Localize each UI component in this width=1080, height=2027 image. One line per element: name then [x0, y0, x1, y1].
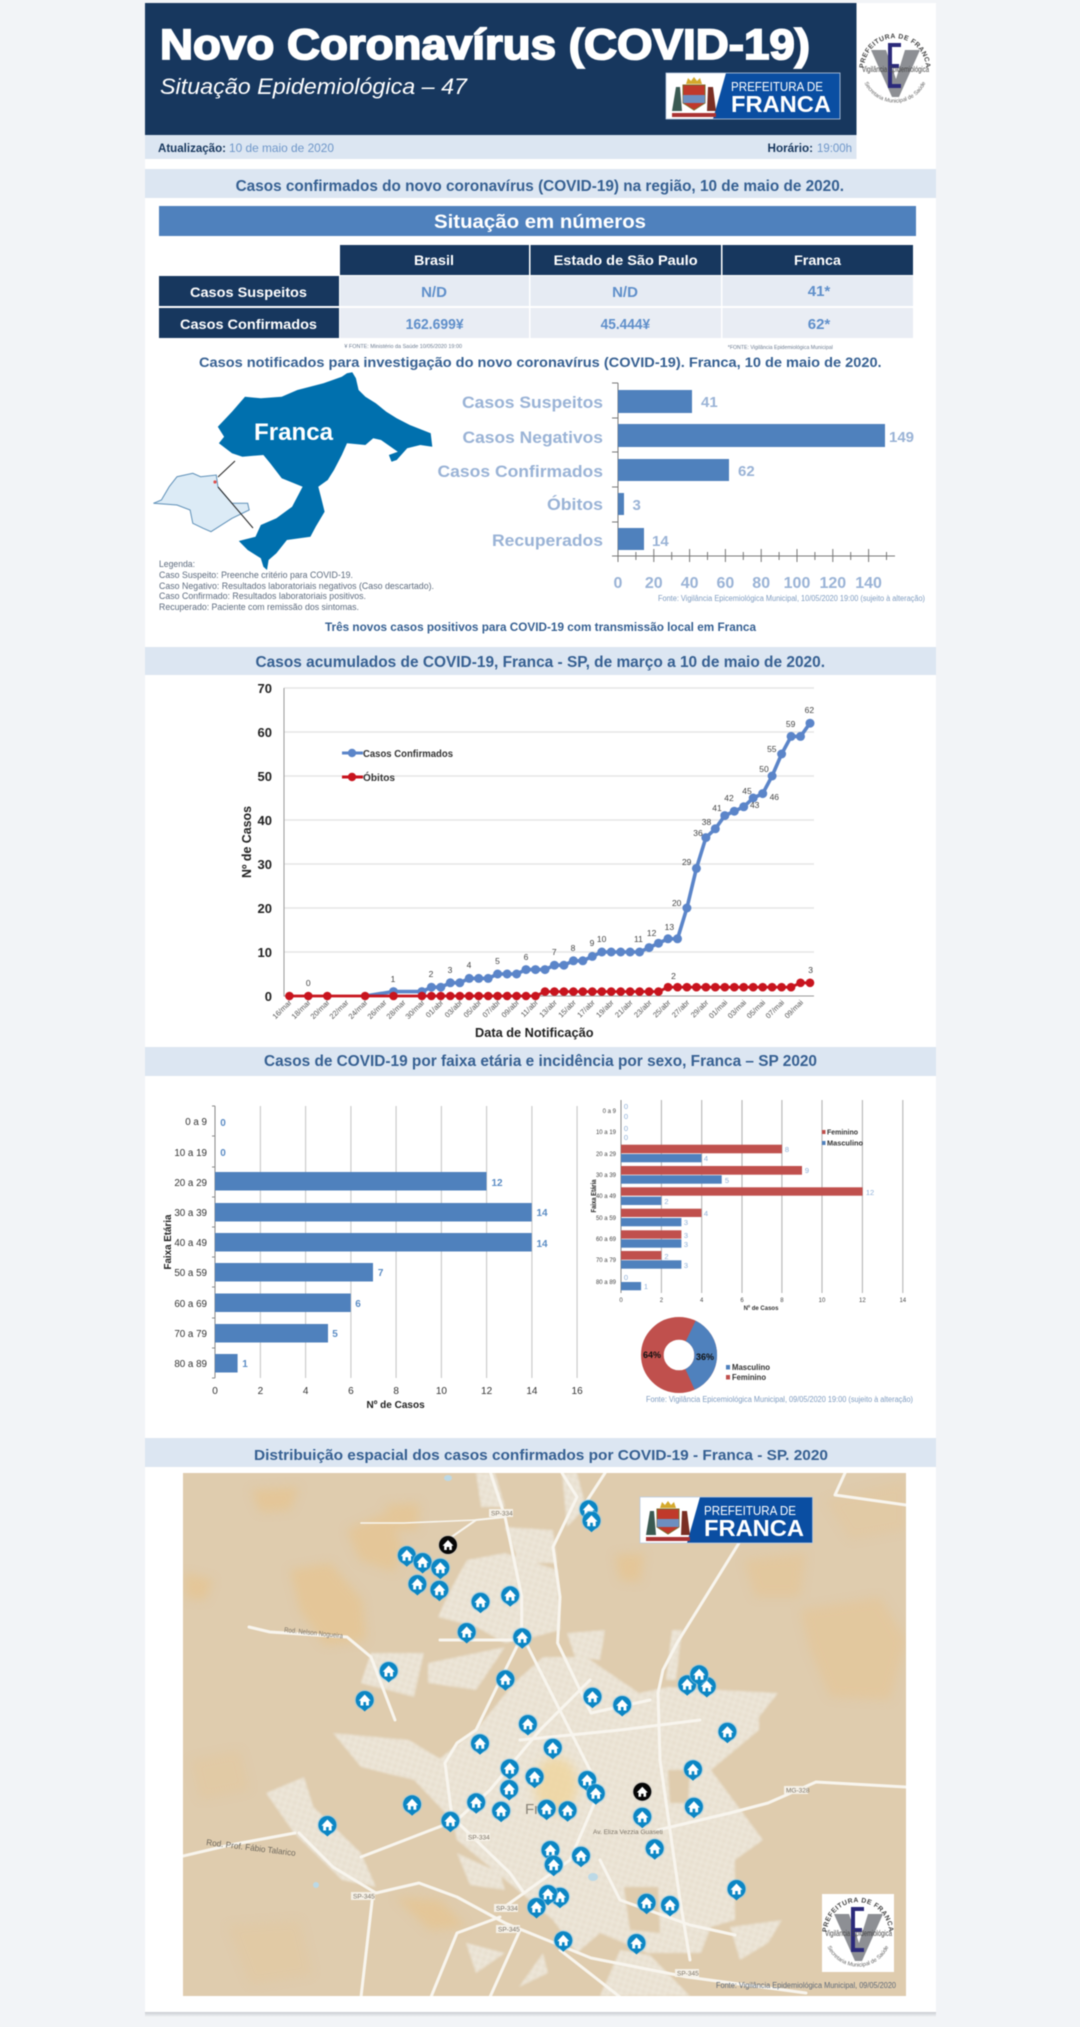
- map road labels: Fr: [525, 1801, 539, 1818]
- chart legend: [342, 749, 453, 784]
- bar chart: faixa etária: 0: [220, 1118, 226, 1129]
- data labels: 59: [786, 719, 796, 729]
- logo: Prefeitura de Franca on map: [640, 1497, 813, 1543]
- legend text: Recuperado: Paciente com remissão dos sintomas.: [159, 602, 359, 612]
- bar chart: incidência por sexo: 12: [866, 1188, 874, 1197]
- data labels: 6: [524, 952, 529, 962]
- data labels: 36: [693, 828, 703, 838]
- bar chart: incidência por sexo: 3: [684, 1231, 688, 1240]
- bar chart: casos notificados: Recuperados: [492, 531, 603, 550]
- map road labels: Rod. Prof. Fábio Talarico: [206, 1837, 297, 1858]
- bar chart: faixa etária: 0: [212, 1386, 218, 1397]
- section heading: região: [145, 169, 936, 198]
- bar chart: incidência por sexo: 50 a 59: [596, 1216, 617, 1222]
- data labels: 20: [672, 898, 682, 908]
- map: Franca municipality: [218, 372, 432, 570]
- data labels: 29: [682, 857, 692, 867]
- map: Franca municipality: Franca: [254, 419, 334, 446]
- data labels: 46: [770, 792, 779, 802]
- header banner: [145, 3, 856, 135]
- map pins: deaths: [438, 1535, 652, 1802]
- x axis date labels: 03/abr: [443, 998, 465, 1019]
- bar chart: casos notificados: Casos Confirmados: [438, 462, 603, 481]
- data labels: 43: [750, 800, 760, 810]
- panel: situação em números: [159, 206, 916, 351]
- bar chart: faixa etária: 14: [526, 1386, 538, 1397]
- data labels: 55: [767, 744, 777, 754]
- bar chart: casos notificados: 41: [701, 394, 718, 411]
- bar chart: incidência por sexo: 30 a 39: [596, 1173, 617, 1179]
- title: Novo Coronavírus (COVID-19): [160, 21, 810, 69]
- bar chart: incidência por sexo: 1: [644, 1282, 648, 1291]
- bar chart: incidência por sexo: 8: [780, 1298, 784, 1304]
- x axis date labels: 03/mai: [726, 998, 748, 1020]
- bar chart: faixa etária: 30 a 39: [174, 1208, 207, 1219]
- series: casos confirmados: [365, 719, 814, 996]
- y axis labels: [258, 681, 272, 1004]
- data labels: 62: [805, 705, 814, 715]
- x axis date labels: 28/mar: [385, 998, 408, 1021]
- x axis date labels: 23/abr: [632, 998, 654, 1019]
- bar chart: casos notificados: 62: [738, 463, 755, 480]
- logo: Prefeitura de Franca: PREFEITURA DE: [731, 80, 823, 94]
- bar chart: faixa etária: 10: [436, 1386, 447, 1397]
- logo: Vigilância Epidemiológica seal: [858, 32, 932, 104]
- data labels: 13: [665, 922, 674, 932]
- footnotes: ¥ FONTE: Ministério da Saúde 10/05/2020 19:00: [344, 344, 462, 350]
- x axis date labels: 07/mai: [764, 998, 786, 1020]
- bar chart: incidência por sexo: 20 a 29: [596, 1152, 617, 1158]
- legend text: Caso Suspeito: Preenche critério para COVID-19.: [159, 570, 353, 580]
- x axis date labels: 16/mar: [271, 998, 294, 1021]
- table: Casos Confirmados: [180, 316, 317, 332]
- logo: Vigilância Epidemiológica on map: [822, 1894, 894, 1972]
- bar chart: incidência por sexo: 0 a 9: [603, 1109, 617, 1115]
- data labels: 0: [306, 978, 311, 988]
- bar chart: incidência por sexo: Nº de Casos: [744, 1306, 779, 1312]
- bar chart: incidência por sexo: Faixa Etária: [591, 1179, 598, 1212]
- bar chart: incidência por sexo: 40 a 49: [596, 1194, 617, 1200]
- bar chart: incidência por sexo: 80 a 89: [596, 1280, 617, 1286]
- bar chart: incidência por sexo: 0: [624, 1124, 628, 1133]
- bar chart: faixa etária: 10 a 19: [174, 1148, 207, 1159]
- bar chart: faixa etária: 12: [481, 1386, 493, 1397]
- table: 62*: [808, 316, 830, 333]
- section heading: distribuição espacial: [145, 1438, 936, 1467]
- bar chart: incidência por sexo: 60 a 69: [596, 1237, 617, 1243]
- heading: casos notificados: Casos notificados para investigação do novo coronavírus (COVID-19). Franca, 10 de maio de 2020.: [199, 354, 882, 370]
- bar chart: incidência por sexo: 4: [700, 1298, 704, 1304]
- update bar: 19:00h: [817, 141, 852, 155]
- bar chart: incidência por sexo: 14: [899, 1298, 907, 1304]
- donut chart: sexo: 64%: [643, 1350, 661, 1360]
- x axis date labels: 26/mar: [366, 998, 389, 1021]
- bar chart: incidência por sexo: 3: [684, 1218, 688, 1227]
- data labels: 3: [808, 965, 813, 975]
- update bar: [145, 135, 856, 159]
- x axis date labels: [271, 998, 805, 1021]
- bar chart: incidência por sexo: 2: [660, 1298, 664, 1304]
- bar chart: faixa etária: 1: [242, 1359, 248, 1370]
- bar chart: incidência por sexo: 2: [664, 1252, 669, 1261]
- bar chart: faixa etária: 14: [536, 1239, 548, 1250]
- map road labels: MG-328: [786, 1788, 810, 1794]
- data labels: 2: [429, 969, 434, 979]
- bar chart: faixa etária: 6: [348, 1386, 354, 1397]
- table: Franca: [794, 252, 841, 268]
- x axis date labels: 01/abr: [424, 998, 446, 1019]
- table: 162.699¥: [406, 316, 464, 333]
- map road labels: SP-334: [491, 1510, 513, 1518]
- logo: Prefeitura de Franca on map: PREFEITURA DE: [704, 1504, 796, 1518]
- x axis date labels: 29/abr: [689, 998, 711, 1019]
- data labels: 41: [712, 803, 722, 813]
- bar chart: faixa etária: 50 a 59: [174, 1268, 207, 1279]
- chart legend: Casos Confirmados: [363, 749, 453, 760]
- x axis date labels: 09/abr: [500, 998, 521, 1019]
- logo: Prefeitura de Franca: [666, 73, 840, 119]
- y axis title: Nº de Casos: [239, 806, 254, 878]
- data labels: 7: [552, 947, 557, 957]
- data labels: 5: [495, 956, 500, 966]
- bar chart: casos notificados: 140: [855, 575, 882, 592]
- x axis date labels: 20/mar: [309, 998, 332, 1021]
- source note: faixa etária: Fonte: Vigilância Epicemiológica Municipal, 09/05/2020 19:00 (sujeito à alteração): [646, 1395, 913, 1404]
- bar chart: incidência por sexo: 12: [859, 1298, 866, 1304]
- legend: sexo: Feminino: [827, 1130, 858, 1136]
- bar chart: incidência por sexo: 0: [624, 1273, 628, 1282]
- note: novos casos: Três novos casos positivos para COVID-19 com transmissão local em Franca: [325, 620, 756, 634]
- footnotes: *FONTE: Vigilância Epidemiológica Municipal: [728, 345, 833, 351]
- section heading: região: Casos confirmados do novo coronavírus (COVID-19) na região, 10 de maio de 2020.: [236, 178, 844, 195]
- x axis date labels: 05/mai: [745, 998, 767, 1020]
- bar chart: faixa etária: 70 a 79: [174, 1329, 207, 1340]
- logo: Prefeitura de Franca on map: FRANCA: [704, 1515, 804, 1541]
- y axis labels: 30: [258, 857, 272, 872]
- x axis date labels: 07/abr: [481, 998, 502, 1019]
- map road labels: SP-334: [496, 1906, 518, 1912]
- bar chart: casos notificados: 0: [614, 575, 623, 592]
- data labels: 10: [597, 934, 607, 944]
- subtitle: Situação Epidemiológica – 47: [160, 74, 468, 99]
- logo: Vigilância Epidemiológica on map: PREFEITURA DE FRANCA: [822, 1896, 894, 1932]
- map: São Paulo state locator: [154, 461, 253, 532]
- legend text: Legenda:: [159, 559, 195, 569]
- bar chart: incidência por sexo: 2: [664, 1197, 669, 1206]
- logo: Vigilância Epidemiológica seal: Vigilância Epidemiológica: [862, 64, 929, 74]
- x axis date labels: 17/abr: [575, 998, 597, 1019]
- map: distribuição espacial: [183, 1473, 906, 1997]
- bar chart: faixa etária: 40 a 49: [174, 1238, 207, 1249]
- x axis date labels: 27/abr: [670, 998, 692, 1019]
- legend text: [159, 559, 434, 612]
- donut chart: sexo: Feminino: [732, 1373, 766, 1382]
- legend: sexo: Masculino: [827, 1140, 863, 1148]
- bar chart: incidência por sexo: 10 a 19: [596, 1130, 617, 1136]
- y axis labels: 0: [265, 989, 272, 1004]
- bar chart: casos notificados: 40: [681, 575, 699, 592]
- bar chart: casos notificados: 20: [645, 575, 663, 592]
- data labels: 45: [742, 786, 752, 796]
- map pins: confirmed cases: [317, 1499, 747, 1954]
- logo: Prefeitura de Franca: FRANCA: [731, 91, 831, 117]
- x axis date labels: 09/mai: [783, 998, 805, 1020]
- table: Casos Suspeitos: [190, 284, 307, 300]
- section heading: faixa etária: [145, 1047, 936, 1076]
- update bar: Horário:: [768, 141, 813, 155]
- donut chart: sexo: [643, 1328, 770, 1382]
- section heading: faixa etária: Casos de COVID-19 por faixa etária e incidência por sexo, Franca – SP 2020: [264, 1053, 817, 1070]
- chart legend: Óbitos: [363, 771, 395, 784]
- x axis date labels: 21/abr: [613, 998, 635, 1019]
- table: Estado de São Paulo: [554, 252, 698, 268]
- section heading: casos acumulados: [145, 647, 936, 675]
- bar chart: faixa etária: 4: [303, 1386, 309, 1397]
- table: Brasil: [414, 252, 454, 268]
- panel: situação em números: Situação em números: [434, 212, 646, 233]
- y axis labels: 60: [258, 725, 272, 740]
- map road labels: Rod. Nelson Nogueira: [284, 1627, 343, 1640]
- logo: Vigilância Epidemiológica seal: PREFEITURA DE FRANCA: [858, 32, 932, 68]
- data labels: 3: [448, 965, 453, 975]
- x axis date labels: 05/abr: [462, 998, 483, 1019]
- bar chart: incidência por sexo: 0: [624, 1133, 628, 1142]
- data labels: 38: [702, 817, 711, 827]
- bar chart: faixa etária: Faixa Etária: [163, 1214, 174, 1270]
- x axis date labels: 18/mar: [290, 998, 313, 1021]
- y axis labels: 40: [258, 813, 272, 828]
- map road labels: SP-345: [353, 1894, 375, 1900]
- bar chart: incidência por sexo: 6: [740, 1298, 744, 1304]
- bar chart: casos notificados: 60: [717, 575, 734, 592]
- bar chart: casos notificados: 14: [652, 533, 669, 550]
- data labels: 2: [671, 971, 676, 981]
- bar chart: faixa etária: Nº de Casos: [367, 1400, 425, 1411]
- x axis date labels: 01/mai: [707, 998, 729, 1020]
- bar chart: faixa etária: 7: [378, 1268, 384, 1279]
- bar chart: incidência por sexo: 3: [684, 1261, 688, 1270]
- bar chart: incidência por sexo: 0: [624, 1112, 628, 1121]
- y axis labels: 10: [258, 945, 272, 960]
- map road labels: SP-345: [677, 1970, 699, 1978]
- bar chart: casos notificados: 100: [784, 575, 810, 592]
- x axis date labels: 13/abr: [537, 998, 559, 1019]
- x axis title: Data de Notificação: [475, 1025, 594, 1040]
- x axis date labels: 30/mar: [404, 998, 427, 1021]
- x axis date labels: 25/abr: [651, 998, 673, 1019]
- bar chart: faixa etária: 60 a 69: [174, 1299, 207, 1310]
- bar chart: faixa etária: 0 a 9: [185, 1117, 207, 1128]
- data labels: 1: [391, 974, 396, 984]
- data labels: 8: [571, 943, 576, 953]
- donut chart: sexo: Masculino: [732, 1363, 770, 1372]
- y axis labels: 20: [258, 901, 272, 916]
- legend text: Caso Negativo: Resultados laboratoriais negativos (Caso descartado).: [159, 581, 434, 591]
- bar chart: incidência por sexo: 9: [805, 1166, 809, 1175]
- y axis labels: 70: [258, 681, 272, 696]
- footnotes: [344, 344, 833, 351]
- bar chart: incidência por sexo: 3: [684, 1240, 688, 1249]
- bar chart: incidência por sexo: [591, 1100, 907, 1312]
- section heading: distribuição espacial: Distribuição espacial dos casos confirmados por COVID-19 - Franca - SP. 2020: [254, 1447, 828, 1464]
- bar chart: faixa etária: 20 a 29: [174, 1178, 207, 1189]
- x axis date labels: 11/abr: [519, 998, 540, 1019]
- table: N/D: [612, 284, 638, 301]
- bar chart: casos notificados: [438, 383, 925, 603]
- data labels: 11: [634, 934, 643, 944]
- bar chart: incidência por sexo: 4: [704, 1154, 708, 1163]
- bar chart: casos notificados: Casos Negativos: [462, 428, 603, 447]
- data labels: 12: [647, 928, 657, 938]
- table: 45.444¥: [601, 316, 651, 333]
- bar chart: faixa etária: 8: [393, 1386, 399, 1397]
- bar chart: faixa etária: 14: [536, 1208, 548, 1219]
- bar chart: casos notificados: Casos Suspeitos: [462, 393, 603, 412]
- y axis labels: 50: [258, 769, 272, 784]
- donut chart: sexo: 36%: [696, 1352, 714, 1362]
- update bar: Atualização:: [158, 141, 226, 155]
- data labels: 4: [467, 960, 472, 970]
- bar chart: casos notificados: 120: [819, 575, 846, 592]
- bar chart: incidência por sexo: 0: [624, 1102, 628, 1111]
- update bar: 10 de maio de 2020: [229, 141, 334, 155]
- section heading: casos acumulados: Casos acumulados de COVID-19, Franca - SP, de março a 10 de maio de 2020.: [256, 654, 825, 671]
- bar chart: faixa etária: 16: [572, 1386, 583, 1397]
- bar chart: faixa etária: 5: [332, 1329, 338, 1340]
- x axis date labels: 24/mar: [347, 998, 370, 1021]
- bar chart: faixa etária: 6: [355, 1299, 361, 1310]
- map road labels: [206, 1509, 810, 1978]
- legend text: Caso Confirmado: Resultados laboratoriais positivos.: [159, 591, 366, 601]
- bar chart: faixa etária: [163, 1106, 583, 1411]
- x axis date labels: 22/mar: [328, 998, 351, 1021]
- logo: Vigilância Epidemiológica on map: Vigilância Epidemiológica: [825, 1928, 892, 1938]
- bar chart: casos notificados: 80: [752, 575, 770, 592]
- series: óbitos: [285, 978, 814, 1000]
- x axis date labels: 19/abr: [594, 998, 616, 1019]
- data labels: 50: [759, 764, 769, 774]
- bar chart: incidência por sexo: 5: [725, 1176, 729, 1185]
- map source note: Fonte: Vigilância Epidemiológica Municipal, 09/05/2020: [716, 1981, 896, 1990]
- line chart: casos acumulados: [239, 681, 814, 1040]
- table: N/D: [421, 284, 447, 301]
- logo: Vigilância Epidemiológica seal: Secretaria Municipal de Saúde: [864, 81, 926, 104]
- bar chart: casos notificados: Óbitos: [547, 495, 603, 514]
- data labels: [306, 705, 814, 988]
- map road labels: SP-345: [498, 1926, 520, 1934]
- bar chart: faixa etária: 12: [491, 1178, 503, 1189]
- bar chart: incidência por sexo: 4: [704, 1209, 708, 1218]
- bar chart: casos notificados: 3: [632, 497, 641, 514]
- bar chart: incidência por sexo: 0: [619, 1298, 623, 1304]
- data labels: 9: [590, 938, 595, 948]
- table: 41*: [808, 283, 830, 300]
- x axis date labels: 15/abr: [556, 998, 578, 1019]
- bar chart: casos notificados: 149: [889, 429, 914, 446]
- bar chart: incidência por sexo: 8: [785, 1145, 789, 1154]
- bar chart: casos notificados: Fonte: Vigilância Epicemiológica Municipal, 10/05/2020 19:00 (sujeito à alteração): [658, 594, 925, 603]
- bar chart: faixa etária: 80 a 89: [174, 1359, 207, 1370]
- bar chart: faixa etária: 0: [220, 1148, 226, 1159]
- bar chart: incidência por sexo: 10: [819, 1298, 826, 1304]
- map road labels: Av. Eliza Vezzia Guaseti: [593, 1829, 663, 1836]
- bar chart: incidência por sexo: 70 a 79: [596, 1258, 617, 1264]
- logo: Vigilância Epidemiológica on map: Secretaria Municipal de Saúde: [827, 1945, 888, 1968]
- table: [159, 245, 913, 338]
- legend: sexo: [822, 1130, 863, 1148]
- bar chart: faixa etária: 2: [258, 1386, 264, 1397]
- map road labels: SP-334: [468, 1834, 490, 1842]
- data labels: 42: [724, 793, 734, 803]
